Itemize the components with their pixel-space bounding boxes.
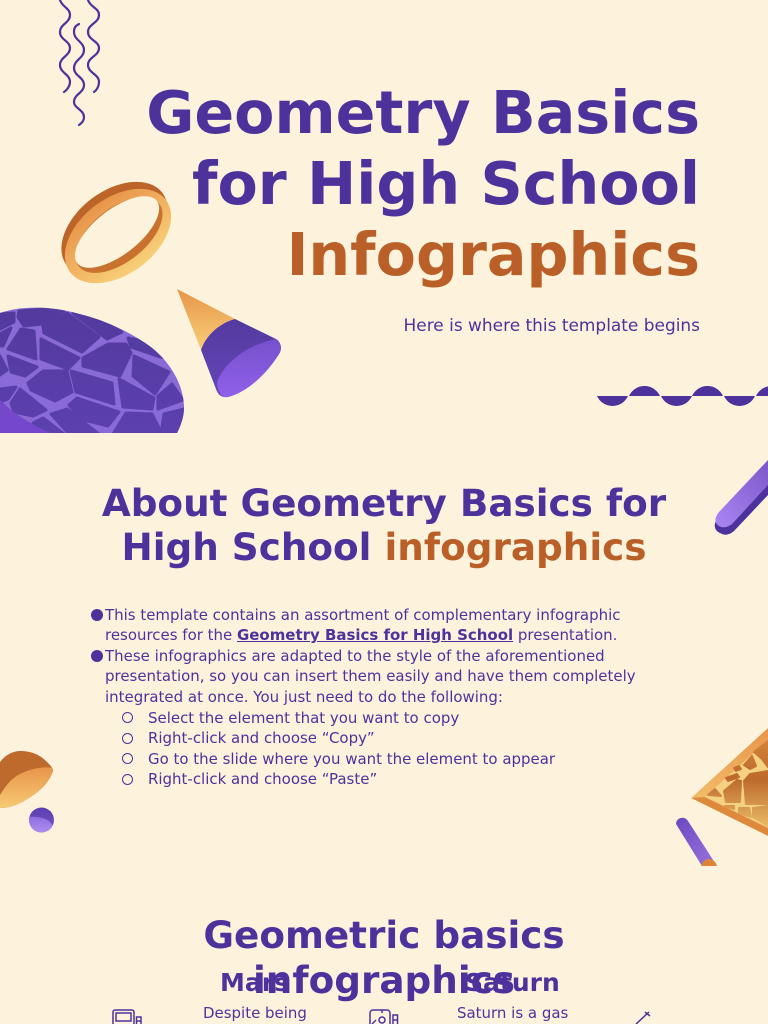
mars heading: Mars [220,968,289,997]
wavy lines [60,0,99,125]
geometric basics heading: infographics [253,958,515,1002]
bullet 2 [91,650,103,662]
pyramid with honeycomb [691,728,768,836]
title: Infographics [287,221,700,289]
about heading: High School infographics [121,525,646,569]
ring [44,163,189,302]
bullet list: integrated at once. You just need to do the following: [105,688,503,706]
bullet list: This template contains an assortment of complementary infographic [105,606,620,624]
title: for High School [192,150,700,218]
purple rod top right [715,460,768,535]
icon: mars computer [113,1010,141,1024]
about heading: About Geometry Basics for [102,481,666,525]
small stick [676,818,717,866]
icon: saturn card [370,1010,398,1024]
dome [0,751,53,808]
geometric basics heading [203,913,565,1002]
about text block [91,606,636,788]
steps list: Select the element that you want to copy [148,708,459,726]
small ball [29,808,54,832]
bullet list: resources for the Geometry Basics for High School presentation. [105,626,617,644]
step markers [122,712,133,785]
bullet 1 [91,608,103,620]
bullet list: These infographics are adapted to the style of the aforementioned [105,647,605,665]
saturn text: Saturn is a gas [457,1004,568,1022]
subtitle: Here is where this template begins [404,315,700,335]
textured purple blob [0,300,190,434]
icon: compass tool [636,1012,650,1024]
geometric basics heading: Geometric basics [203,913,565,957]
bullet list: presentation, so you can insert them easily and have them completely [105,667,636,685]
cone [177,289,281,397]
title [146,79,700,289]
steps list: Go to the slide where you want the element to appear [148,750,555,768]
about heading [102,481,666,569]
saturn heading: Saturn [465,968,560,997]
mars text: Despite being [203,1004,307,1022]
steps list: Right-click and choose “Paste” [148,770,377,788]
steps list [148,708,556,788]
steps list: Right-click and choose “Copy” [148,729,375,747]
scallop wave [597,386,768,406]
bullet list [104,606,636,706]
title: Geometry Basics [146,79,700,147]
